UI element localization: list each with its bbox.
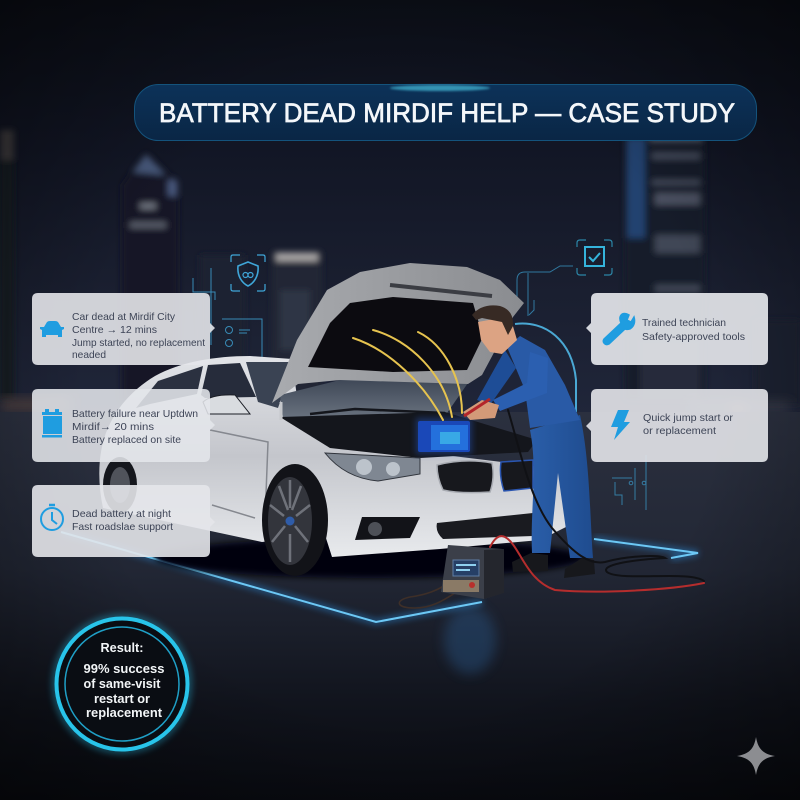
card: dead battery at night	[32, 485, 215, 557]
card: car dead at Mirdif City Centre	[32, 293, 215, 365]
car	[99, 263, 585, 578]
card text: Fast roadslae support	[72, 521, 173, 533]
card text: Mirdif→ 20 mins	[72, 421, 154, 433]
electric spark arcs	[353, 330, 462, 420]
card: quick jump start	[586, 389, 768, 462]
hair	[472, 305, 513, 335]
result text: replacement	[86, 705, 163, 720]
card text: Jump started, no replacement	[72, 337, 205, 349]
icon: lightning bolt	[611, 410, 630, 440]
card text	[72, 311, 205, 361]
technician	[463, 305, 595, 578]
sparkle watermark	[737, 737, 775, 775]
jump cables	[399, 410, 704, 608]
torso	[507, 336, 580, 428]
title text: BATTERY DEAD MIRDIF HELP — CASE STUDY	[159, 98, 735, 128]
open hood	[272, 263, 524, 420]
result text: of same-visit	[84, 676, 161, 691]
car battery	[416, 418, 472, 454]
card text: Centre → 12 mins	[72, 324, 157, 336]
engine bay	[280, 412, 537, 458]
front arm	[493, 352, 548, 411]
HUD circuit lines right	[517, 266, 646, 510]
hands and clamp	[463, 400, 499, 420]
card: trained technician	[586, 293, 768, 365]
car body	[99, 356, 568, 557]
card text: Quick jump start or	[643, 412, 734, 424]
icon: battery	[42, 409, 62, 438]
background: night sky	[0, 0, 800, 420]
card text: Car dead at Mirdif City	[72, 311, 176, 323]
background: blurred city skyline	[0, 130, 800, 414]
result text: restart or	[94, 691, 150, 706]
hood strut	[280, 402, 282, 420]
card text: Battery failure near Uptdwn	[72, 408, 198, 420]
HUD circuit lines left	[193, 268, 262, 358]
windscreen under hood	[280, 375, 470, 418]
result text: 99% success	[84, 661, 164, 676]
icon: shield badge	[231, 255, 265, 291]
kidney grille	[437, 460, 533, 493]
windshield	[246, 362, 294, 408]
card text	[643, 412, 734, 437]
rear arm	[477, 350, 516, 405]
glowing arc behind technician	[515, 323, 576, 412]
card text: neaded	[72, 349, 106, 361]
result text: Result:	[100, 640, 144, 655]
head	[478, 316, 517, 354]
card text: Trained technician	[642, 317, 726, 329]
rear wheel	[103, 457, 137, 513]
card text: Dead battery at night	[72, 508, 171, 520]
neon parking outline	[61, 532, 698, 622]
icon: stopwatch	[41, 505, 63, 530]
result text	[84, 640, 164, 720]
front wheel	[262, 464, 328, 576]
icon: car	[40, 321, 64, 337]
card text: Safety-approved tools	[642, 331, 745, 343]
fog lamp	[355, 517, 420, 540]
car shadow	[155, 538, 585, 578]
ground reflection	[444, 606, 496, 674]
icon: wrench	[603, 314, 635, 345]
legs	[530, 415, 593, 558]
body crease	[210, 430, 268, 520]
result badge	[56, 618, 188, 750]
shoes	[512, 553, 548, 572]
icon: checkbox badge	[577, 240, 612, 275]
lower intake	[437, 513, 533, 539]
card: battery failure near Uptown Mirdif	[32, 389, 215, 462]
headlight	[325, 453, 420, 481]
portable jump starter	[441, 545, 504, 599]
card text	[72, 508, 173, 533]
card text	[642, 317, 745, 343]
side mirror	[203, 395, 250, 414]
background: asphalt ground	[0, 412, 800, 800]
rear windows	[136, 366, 203, 408]
card text	[72, 408, 198, 446]
hood inner dark panel	[308, 297, 483, 372]
title banner	[134, 84, 756, 140]
card text: or replacement	[643, 425, 716, 437]
wiper	[310, 409, 445, 414]
front side window	[201, 363, 256, 398]
card text: Battery replaced on site	[72, 434, 181, 446]
